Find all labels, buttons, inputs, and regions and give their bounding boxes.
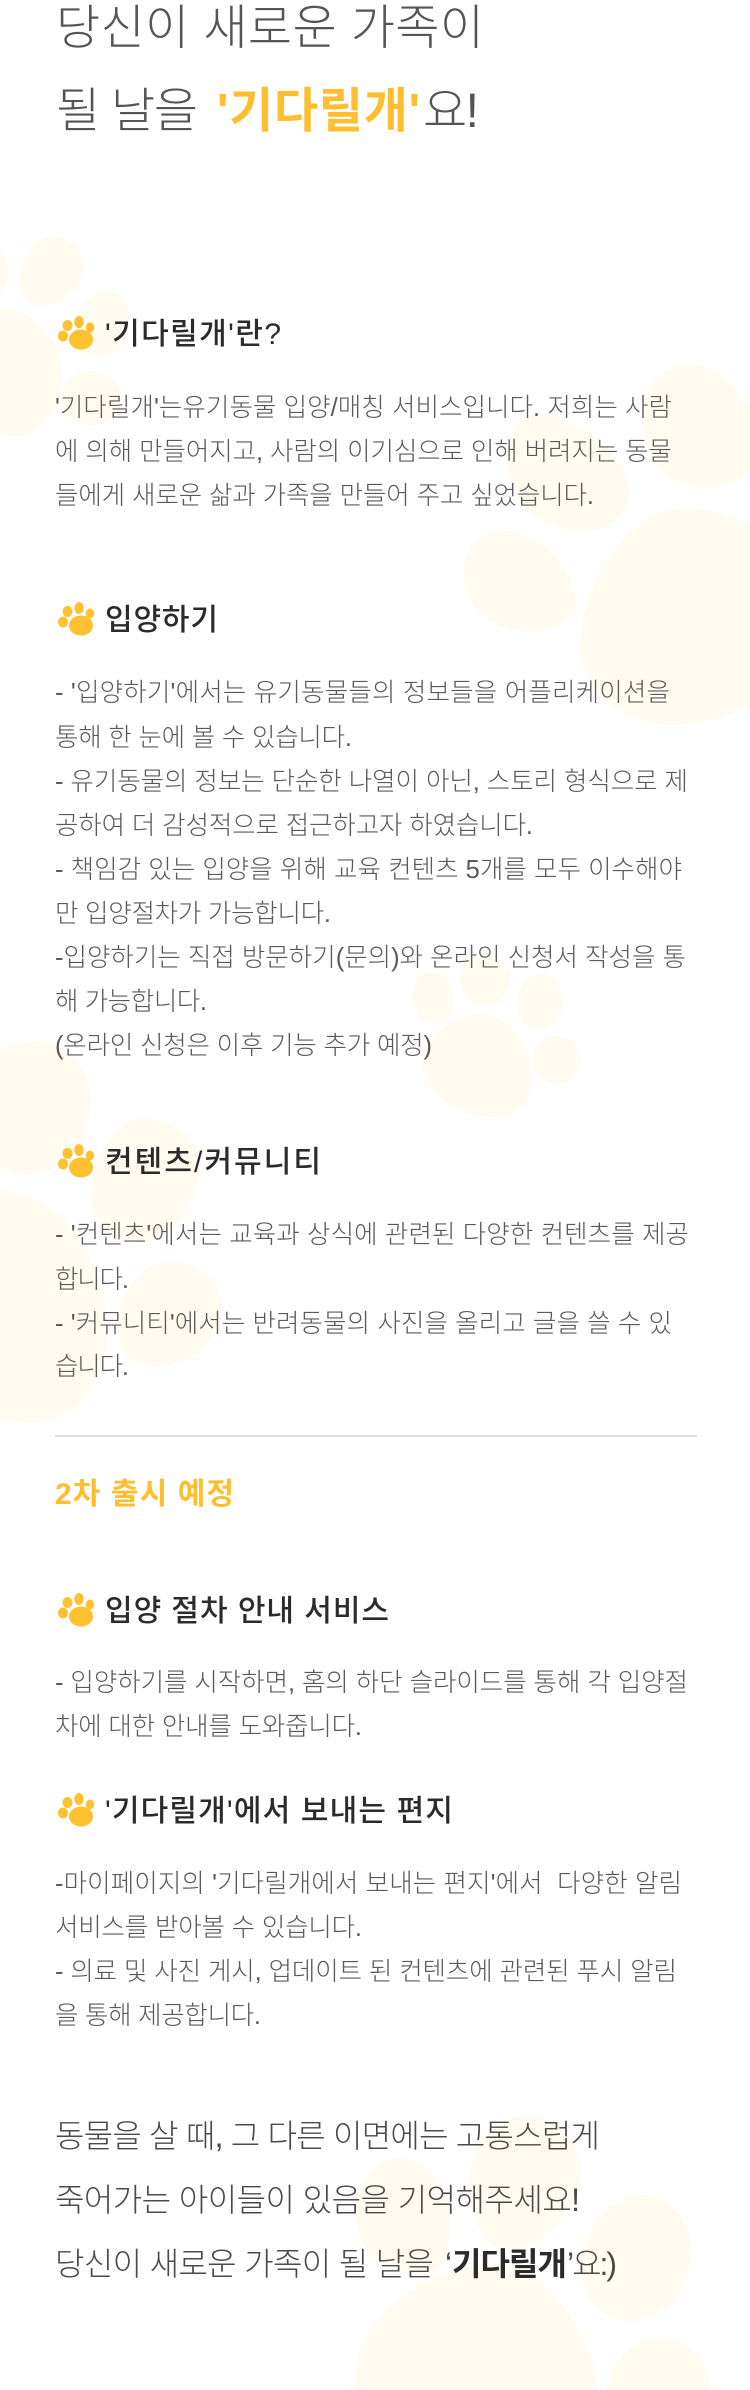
icon: paw <box>58 316 94 350</box>
body text: - '입양하기'에서는 유기동물들의 정보들을 어플리케이션을 <box>55 679 670 707</box>
body text: 만 입양절차가 가능합니다. <box>55 900 331 928</box>
body text <box>55 1669 688 1741</box>
paw print: top left <box>0 236 138 437</box>
heading: 입양 절차 안내 서비스 <box>105 1595 389 1628</box>
paw print: middle left <box>0 1041 221 1423</box>
section: 입양 절차 안내 서비스 <box>55 1593 688 1741</box>
closing line 3: ‘ <box>445 2246 452 2282</box>
section: 입양하기 <box>55 602 688 1060</box>
icon: paw <box>58 1593 94 1626</box>
icon: paw <box>58 1793 94 1826</box>
body text: 을 통해 제공합니다. <box>55 2002 261 2030</box>
closing line 1: 동물을 살 때, 그 다른 이면에는 고통스럽게 <box>55 2118 600 2154</box>
title line 1: 당신이 새로운 가족이 <box>56 2 484 55</box>
body text: 공하여 더 감성적으로 접근하고자 하였습니다. <box>55 812 533 840</box>
heading: 입양하기 <box>105 604 218 637</box>
body text: 서비스를 받아볼 수 있습니다. <box>55 1914 362 1942</box>
paw print: center <box>409 954 586 1117</box>
body text <box>55 394 672 510</box>
closing line 2: 죽어가는 아이들이 있음을 기억해주세요! <box>55 2182 580 2218</box>
body text: - 입양하기를 시작하면, 홈의 하단 슬라이드를 통해 각 입양절 <box>55 1669 688 1697</box>
paw print: bottom right <box>355 2116 711 2390</box>
body text <box>55 1870 682 2030</box>
heading: '기다릴개'란? <box>105 318 281 351</box>
body text: - 의료 및 사진 게시, 업데이트 된 컨텐츠에 관련된 푸시 알림 <box>55 1958 677 1986</box>
title <box>56 2 484 138</box>
title line 2: 될 날을 <box>56 85 198 138</box>
body text: - 유기동물의 정보는 단순한 나열이 아닌, 스토리 형식으로 제 <box>55 768 688 796</box>
icon: paw <box>58 1144 94 1178</box>
title line 2: '기다릴개' <box>217 85 420 138</box>
body text: - '컨텐츠'에서는 교육과 상식에 관련된 다양한 컨텐츠를 제공 <box>55 1221 689 1249</box>
body text: 합니다. <box>55 1266 129 1294</box>
closing line 3: ’요:) <box>567 2246 617 2282</box>
body text: 통해 한 눈에 볼 수 있습니다. <box>55 724 352 752</box>
section: 기다릴개에서 보내는 편지 <box>55 1793 682 2030</box>
body text: - '커뮤니티'에서는 반려동물의 사진을 올리고 글을 쓸 수 있 <box>55 1310 672 1338</box>
title line 2 <box>56 85 479 138</box>
heading: 2차 출시 예정: 2차 출시 예정 <box>55 1478 234 1511</box>
heading: 컨텐츠/커뮤니티 <box>105 1146 321 1179</box>
paw print: top right <box>463 364 750 725</box>
body text <box>55 1221 689 1381</box>
title line 2: 요! <box>423 85 479 138</box>
body text: -입양하기는 직접 방문하기(문의)와 온라인 신청서 작성을 통 <box>55 944 686 972</box>
body text: -마이페이지의 '기다릴개에서 보내는 편지'에서 다양한 알림 <box>55 1870 682 1898</box>
body text: - 책임감 있는 입양을 위해 교육 컨텐츠 5개를 모두 이수해야 <box>55 856 682 884</box>
body text: '기다릴개'는유기동물 입양/매칭 서비스입니다. 저희는 사람 <box>55 394 672 422</box>
section: 컨텐츠/커뮤니티 <box>55 1144 689 1381</box>
body text: 차에 대한 안내를 도와줍니다. <box>55 1713 362 1741</box>
body text: 에 의해 만들어지고, 사람의 이기심으로 인해 버려지는 동물 <box>55 438 672 466</box>
body text: (온라인 신청은 이후 기능 추가 예정) <box>55 1032 432 1060</box>
divider <box>55 1435 697 1437</box>
closing line 3: 기다릴개 <box>452 2246 567 2282</box>
closing line 3: 당신이 새로운 가족이 될 날을 <box>55 2246 434 2282</box>
section: 기다릴개란 <box>55 316 672 510</box>
body text <box>55 679 688 1060</box>
body text: 들에게 새로운 삶과 가족을 만들어 주고 싶었습니다. <box>55 482 594 510</box>
heading: '기다릴개'에서 보내는 편지 <box>105 1795 453 1828</box>
icon: paw <box>58 602 94 636</box>
closing message <box>55 2118 617 2282</box>
closing line 3 <box>55 2246 617 2282</box>
body text: 습니다. <box>55 1353 129 1381</box>
body text: 해 가능합니다. <box>55 988 207 1016</box>
